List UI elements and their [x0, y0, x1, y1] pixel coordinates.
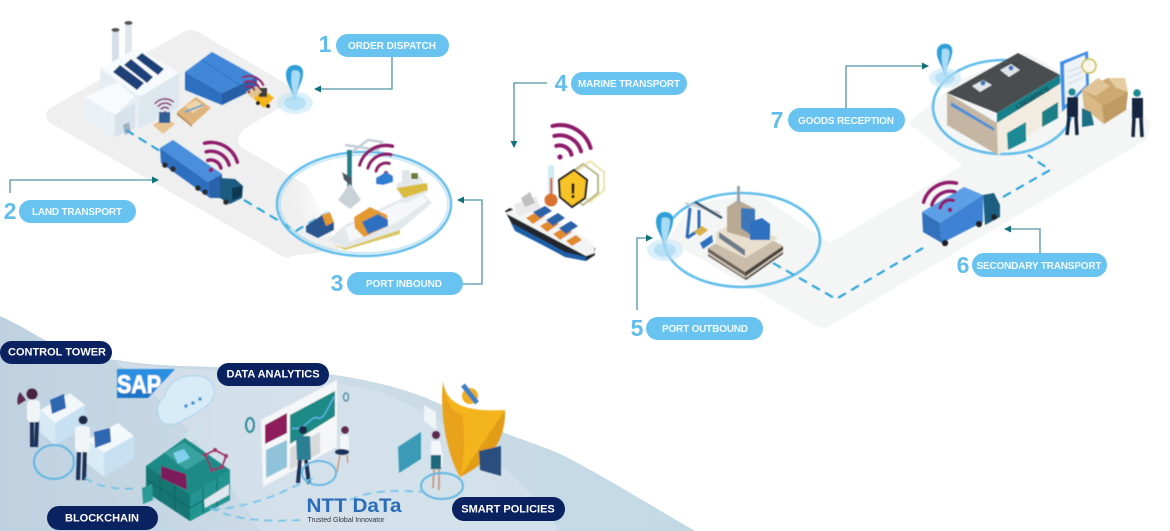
person left	[17, 388, 40, 447]
icon: wifi marine	[540, 118, 595, 170]
blue box	[376, 172, 393, 185]
label 7: goods reception: GOODS RECEPTION	[798, 116, 894, 127]
NTT DATA logo: Trusted Global Innovator	[308, 515, 385, 524]
pill: data analytics: DATA ANALYTICS	[226, 368, 320, 380]
label 4: marine transport	[555, 70, 687, 96]
wifi: warehouse forklift	[238, 73, 265, 97]
ring	[34, 445, 74, 479]
dashed route right	[773, 155, 1050, 299]
port outbound ellipse	[664, 193, 820, 287]
arrow 4	[510, 83, 547, 148]
label 7: goods reception: 7	[771, 107, 783, 133]
arrow 1	[314, 57, 392, 92]
label 3: port inbound: PORT INBOUND	[366, 279, 442, 290]
icon: pin order dispatch	[277, 65, 313, 114]
solar panels	[113, 53, 164, 90]
label 6: secondary transport	[957, 252, 1107, 278]
open cardboard box	[1082, 78, 1128, 124]
shield smart policies	[442, 382, 505, 477]
desks	[40, 393, 134, 477]
arrow 3	[457, 196, 482, 284]
port building	[708, 186, 783, 280]
policy panels	[398, 405, 501, 476]
analyst man	[296, 426, 336, 485]
blue containers	[185, 52, 257, 105]
forklift	[246, 86, 274, 108]
port inbound ellipse	[277, 152, 451, 256]
arrow 6	[1004, 226, 1040, 253]
crane	[338, 140, 382, 209]
dashed route bottom	[85, 478, 425, 521]
label 3: port inbound	[331, 270, 463, 296]
pill: blockchain	[47, 506, 158, 530]
NTT DATA logo: NTT DaTa	[306, 496, 402, 517]
decorative rings	[246, 393, 348, 432]
arrow 7	[846, 62, 929, 108]
icon: cloud	[158, 376, 214, 424]
warehouse sign: LOGISTICS	[1015, 86, 1051, 111]
policy woman	[421, 431, 463, 499]
ground: right logistics area	[668, 52, 1152, 328]
wifi: truck	[193, 137, 241, 181]
label 7: goods reception	[771, 107, 905, 133]
label 1: order dispatch: 1	[319, 31, 332, 57]
truck land transport	[160, 140, 243, 205]
pill: smart policies: SMART POLICIES	[461, 504, 555, 516]
label 1: order dispatch	[319, 31, 449, 57]
label 6: secondary transport: 6	[957, 252, 969, 278]
SAP logo: SAP	[117, 371, 161, 399]
factory	[85, 21, 179, 137]
icon: pin port outbound	[647, 212, 683, 261]
truck secondary transport	[922, 187, 1000, 246]
dashed route left	[126, 130, 330, 231]
wifi: secondary truck	[920, 177, 968, 221]
pill: blockchain: BLOCKCHAIN	[65, 512, 139, 524]
port crane	[685, 202, 722, 249]
pill: control tower: CONTROL TOWER	[8, 346, 106, 358]
wifi: port inbound	[356, 140, 404, 184]
label 5: port outbound	[631, 315, 763, 341]
pill: control tower	[0, 341, 112, 364]
goods reception ellipse	[933, 60, 1073, 154]
analyst woman	[335, 426, 349, 472]
ground: left logistics area	[46, 30, 340, 257]
warehouse	[947, 53, 1060, 155]
label 4: marine transport: 4	[555, 70, 568, 96]
pallets with boxes	[153, 97, 211, 134]
chimneys	[112, 21, 132, 63]
clipboard	[1060, 51, 1096, 112]
label 1: order dispatch: ORDER DISPATCH	[348, 41, 436, 52]
icon: thermometer	[544, 165, 558, 206]
label 6: secondary transport: SECONDARY TRANSPORT	[976, 261, 1102, 272]
control tower scene	[17, 388, 134, 480]
workers	[1067, 88, 1143, 137]
ship inbound	[306, 170, 432, 250]
label 4: marine transport: MARINE TRANSPORT	[578, 79, 680, 90]
label 2: land transport: LAND TRANSPORT	[32, 207, 122, 218]
NTT DATA logo	[306, 496, 402, 524]
icon: pin goods reception	[929, 44, 961, 88]
label 3: port inbound: 3	[331, 270, 343, 296]
screens	[50, 394, 111, 448]
arrow 5	[637, 234, 653, 310]
label 2: land transport: 2	[4, 198, 16, 224]
pill: data analytics	[217, 363, 329, 386]
dashboard	[261, 380, 337, 487]
icon: warning hexagon: !	[570, 180, 576, 203]
icon: warning hexagon	[559, 161, 604, 207]
blockchain cubes	[142, 426, 230, 521]
person right	[75, 416, 90, 480]
bottom wave background	[0, 316, 695, 531]
ship marine	[505, 192, 595, 261]
pill: smart policies	[452, 497, 565, 521]
arrow 2	[10, 176, 159, 193]
label 5: port outbound: PORT OUTBOUND	[662, 324, 748, 335]
wifi: pallet	[155, 98, 174, 114]
label 2: land transport	[4, 198, 136, 224]
label 5: port outbound: 5	[631, 315, 644, 341]
